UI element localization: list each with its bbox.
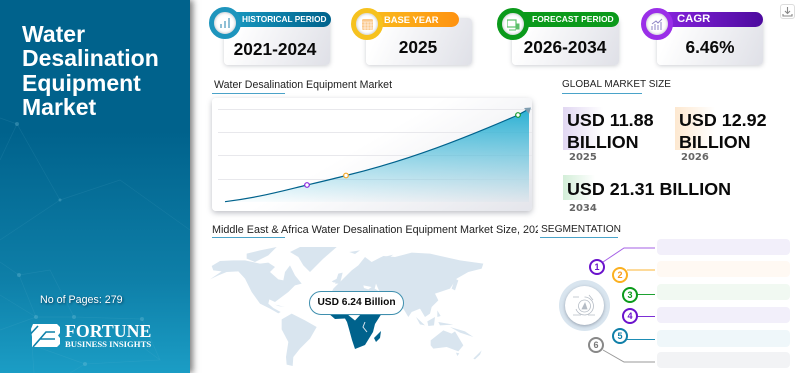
value: 2021-2024 <box>234 39 316 59</box>
heading: market chart: Water Desalination Equipment Market <box>214 79 392 91</box>
year: 2034 <box>569 202 597 214</box>
tint <box>563 175 595 200</box>
logo mark <box>31 324 60 347</box>
tint <box>563 107 603 150</box>
stat card: forecast period <box>497 8 621 68</box>
segment bar 3 <box>657 284 790 300</box>
value: 2026-2034 <box>524 37 606 57</box>
amount: BILLION <box>567 132 639 152</box>
stat card: base year <box>351 8 474 68</box>
heading underline <box>562 92 642 94</box>
segment 3: 3 <box>627 290 632 300</box>
logo <box>31 321 151 349</box>
logo wordmark: FORTUNE <box>65 321 151 341</box>
stat card: historical period <box>209 7 332 68</box>
logo tagline: BUSINESS INSIGHTS <box>65 339 151 349</box>
segmentation connectors <box>602 248 655 362</box>
amount <box>567 110 654 152</box>
card body <box>512 18 619 65</box>
segment bar 1 <box>657 239 790 255</box>
banner: BASE YEAR <box>384 14 439 25</box>
amount: USD 21.31 BILLION <box>567 178 731 198</box>
heading: global market size: GLOBAL MARKET SIZE <box>562 79 671 90</box>
heading underline <box>212 236 285 238</box>
banner <box>657 12 763 27</box>
segment 4: 4 <box>627 311 632 321</box>
value pill: USD 6.24 Billion <box>317 296 396 308</box>
value pill <box>309 290 404 314</box>
value: 2026 <box>675 107 767 162</box>
segment bar 5 <box>657 330 790 347</box>
value: 2034 <box>563 175 731 214</box>
title <box>22 21 159 120</box>
segment bar 2 <box>657 261 790 277</box>
heading underline <box>540 236 618 238</box>
amount <box>679 110 767 152</box>
download button <box>780 4 795 19</box>
card body <box>366 18 472 65</box>
badge icon <box>351 8 383 40</box>
segment 1 <box>589 259 605 275</box>
banner: HISTORICAL PERIOD <box>242 14 327 24</box>
amount: BILLION <box>679 132 751 152</box>
segment 5: 5 <box>617 331 622 341</box>
stat card: CAGR <box>641 8 765 68</box>
segment bar 4 <box>657 307 790 323</box>
page count: No of Pages: 279 <box>40 294 123 306</box>
amount: USD 12.92 <box>679 110 767 130</box>
network pattern <box>0 118 190 373</box>
banner <box>224 12 331 27</box>
card body <box>224 18 330 65</box>
panel: line chart <box>212 98 532 211</box>
card body <box>657 18 763 65</box>
value: 2025 <box>399 37 437 57</box>
value: 6.46% <box>685 37 734 57</box>
tint <box>675 107 715 150</box>
year: 2026 <box>681 152 709 162</box>
segment 4 <box>622 308 638 324</box>
segment bar 6 <box>657 352 790 368</box>
highlighted region <box>328 313 382 349</box>
banner <box>366 12 459 27</box>
banner: CAGR <box>677 13 710 25</box>
title: Equipment <box>22 70 141 96</box>
banner: FORECAST PERIOD <box>532 14 614 24</box>
heading: regional map: Middle East & Africa Water Desalination Equipment Market Size, 2025 <box>212 224 538 236</box>
segment 2 <box>612 267 628 283</box>
segment 6 <box>588 337 604 353</box>
year: 2025 <box>569 152 597 162</box>
title: Desalination <box>22 45 159 71</box>
heading underline <box>212 92 285 94</box>
segment 5 <box>612 328 628 344</box>
panel: sidebar <box>0 0 190 373</box>
badge icon <box>209 7 241 39</box>
segment 6: 6 <box>593 340 598 350</box>
segment 1: 1 <box>594 262 600 272</box>
segment 3 <box>622 287 638 303</box>
segmentation hub <box>559 280 610 331</box>
hub icon <box>573 294 595 316</box>
amount: USD 11.88 <box>567 110 654 130</box>
title: Market <box>22 94 96 120</box>
world map <box>210 247 484 366</box>
segment 2: 2 <box>617 270 622 280</box>
banner <box>512 12 619 27</box>
title: Water <box>22 21 85 47</box>
value: 2025 <box>563 107 654 162</box>
badge icon <box>497 8 529 40</box>
heading: segmentation: SEGMENTATION <box>541 224 621 235</box>
badge icon <box>641 8 673 40</box>
hub disc <box>565 286 604 325</box>
